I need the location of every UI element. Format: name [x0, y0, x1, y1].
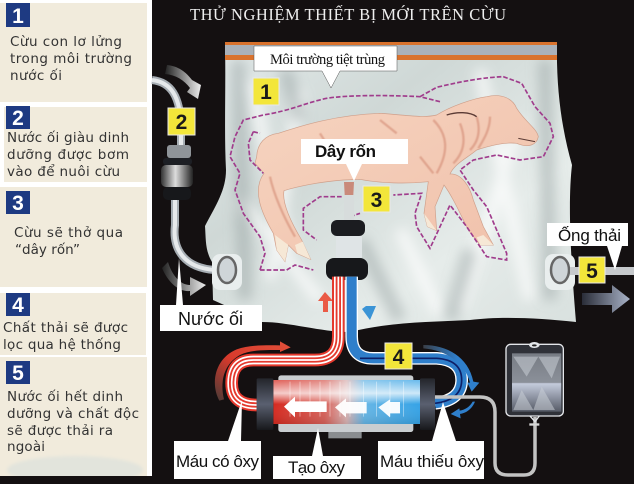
panel: step 3: Cừu sẽ thở qua — [14, 225, 123, 241]
panel: step 3 — [0, 187, 147, 287]
panel: step 5 — [0, 357, 152, 484]
panel: step 2: Nước ối giàu dinh — [7, 129, 129, 146]
red flow arrow — [215, 341, 291, 401]
panel: step 1: Cừu con lơ lửng — [10, 34, 122, 50]
oxygenator caps — [257, 378, 435, 430]
panel: step 5: sẽ được thải ra — [7, 423, 113, 439]
oxygenator base — [328, 428, 362, 438]
panel: step 4 — [0, 293, 146, 355]
deoxygenated tube — [352, 277, 462, 403]
label: oxygenated blood: Máu có ôxy — [176, 452, 260, 471]
yellow marker 1: 1 — [260, 81, 272, 104]
yellow marker 2 — [168, 108, 195, 135]
umbilical connector — [326, 182, 368, 280]
label: sterile environment — [254, 46, 397, 88]
right port — [545, 254, 575, 290]
oxygenated tube — [232, 277, 338, 405]
inlet tube — [152, 80, 215, 270]
label: oxygenator: Tạo ôxy — [288, 458, 346, 477]
panel: step 2: 2 — [12, 107, 24, 130]
panel: steps sidebar — [0, 0, 152, 484]
panel: step 4: lọc qua hệ thống — [3, 336, 121, 353]
panel: step 2: vào để nuôi cừu — [7, 163, 120, 180]
lamb body — [255, 96, 538, 262]
outlet arrow — [582, 285, 630, 313]
panel: step 1: nước ối — [10, 67, 62, 84]
blue flow arrow — [423, 345, 479, 418]
yellow marker 3 — [363, 186, 390, 212]
blood flow arrow: up — [318, 292, 333, 312]
yellow marker 1 — [253, 78, 279, 105]
outlet tube — [570, 267, 634, 275]
inlet connector — [161, 145, 193, 200]
flow arrows inside oxygenator — [284, 397, 400, 417]
oxygenator — [257, 375, 435, 438]
left port — [212, 254, 242, 290]
label: deoxygenated blood — [378, 402, 484, 479]
panel: step 1 — [0, 3, 147, 102]
yellow marker 3: 3 — [371, 189, 382, 212]
label: amniotic fluid — [160, 258, 262, 331]
panel: step 2: dưỡng được bơm — [7, 147, 129, 163]
panel: step 1: 1 — [12, 5, 24, 28]
lamb with dashed outline — [230, 77, 553, 270]
panel: step 5: 5 — [12, 362, 24, 385]
lower flow arrow — [162, 262, 206, 296]
title: THỬ NGHIỆM THIẾT BỊ MỚI TRÊN CỪU — [190, 5, 506, 24]
yellow marker 5: 5 — [586, 260, 598, 283]
yellow marker 4 — [385, 343, 412, 369]
panel: step 5: Nước ối hết dinh — [7, 388, 123, 405]
blood flow arrow: down — [362, 306, 376, 320]
label: amniotic fluid: Nước ối — [178, 309, 243, 329]
waste tube — [435, 397, 535, 475]
panel: step 3: 3 — [12, 192, 24, 215]
yellow marker 2: 2 — [176, 111, 187, 134]
panel: step 5: ngoài — [7, 439, 45, 455]
panel: step 5: dưỡng và chất độc — [7, 406, 139, 422]
label: deoxygenated blood: Máu thiếu ôxy — [380, 452, 484, 471]
oxygenator cylinder — [273, 375, 420, 432]
label: oxygenated blood — [174, 400, 261, 479]
panel: step 1: trong môi trường — [10, 51, 132, 67]
panel: step 4: 4 — [12, 294, 24, 317]
inlet flow arrow — [165, 65, 201, 99]
dashed membrane line — [230, 77, 553, 270]
panel: step 4: Chất thải sẽ được — [3, 320, 128, 336]
label: waste tube: Ống thải — [558, 225, 621, 245]
label: umbilical cord — [301, 139, 408, 181]
panel: step 3: “dây rốn” — [15, 241, 80, 258]
label: sterile environment: Môi trường tiệt trùng — [270, 52, 385, 68]
sterile bag — [205, 42, 576, 332]
panel: step 2 — [4, 106, 147, 182]
yellow marker 4: 4 — [393, 346, 405, 369]
label: umbilical cord: Dây rốn — [315, 142, 376, 161]
label: oxygenator — [273, 428, 361, 479]
yellow marker 5 — [579, 257, 605, 283]
collection bag — [506, 342, 563, 426]
label: waste tube — [547, 223, 628, 270]
